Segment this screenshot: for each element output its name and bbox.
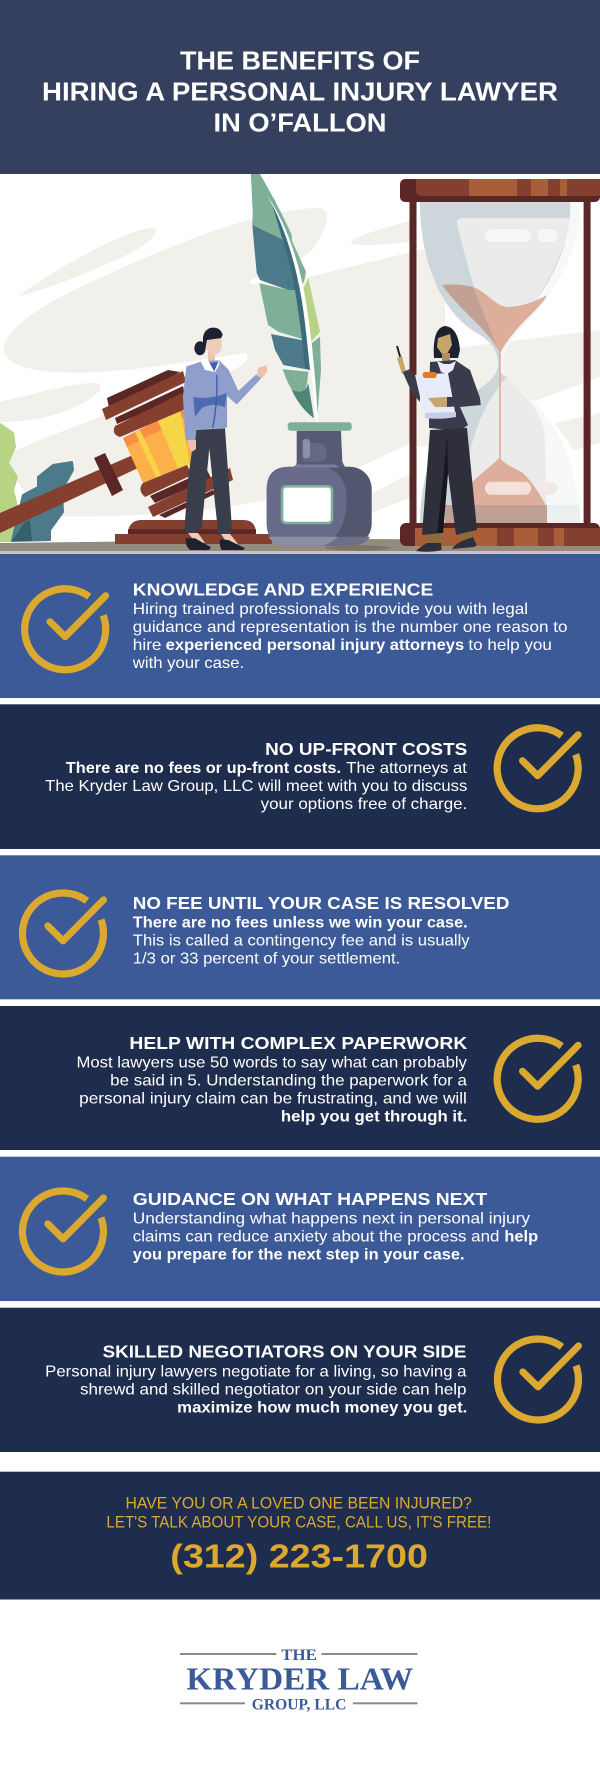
call to action text	[106, 1495, 491, 1532]
neck and head	[208, 352, 215, 365]
body text: claims can reduce anxiety about the process and	[133, 1228, 499, 1245]
body text: be said in 5. Understanding the paperwork for a	[110, 1072, 467, 1089]
body text	[45, 1363, 467, 1416]
panel: help with paperwork	[0, 1006, 600, 1150]
logo: GROUP, LLC	[252, 1696, 346, 1713]
heading: KNOWLEDGE AND EXPERIENCE	[133, 580, 433, 600]
panel: no fee until resolved	[0, 855, 600, 999]
body text: help	[504, 1228, 538, 1245]
logo: KRYDER LAW	[186, 1660, 413, 1696]
icon: gavel	[0, 370, 272, 544]
logo: THE	[281, 1647, 317, 1664]
phone number: (312) 223-1700	[170, 1537, 428, 1574]
body text: Understanding what happens next in personal injury	[133, 1210, 530, 1227]
trousers	[422, 428, 477, 535]
hourglass frame	[400, 179, 600, 546]
heading: SKILLED NEGOTIATORS ON YOUR SIDE	[103, 1342, 467, 1362]
sand	[442, 285, 547, 353]
body text: The attorneys at	[346, 760, 467, 777]
call to action text: HAVE YOU OR A LOVED ONE BEEN INJURED?	[126, 1495, 472, 1513]
icon: check circle	[22, 1191, 104, 1272]
icon: ink bottle	[267, 422, 391, 551]
glass	[420, 202, 580, 524]
bottle label	[282, 486, 332, 523]
body text	[45, 760, 467, 813]
body text: personal injury claim can be frustrating, and we will	[79, 1090, 467, 1107]
heading: NO FEE UNTIL YOUR CASE IS RESOLVED	[133, 893, 509, 913]
heading: GUIDANCE ON WHAT HAPPENS NEXT	[133, 1189, 488, 1209]
body text: hire	[133, 637, 162, 654]
body text: help you get through it.	[281, 1108, 467, 1125]
call to action text: LET'S TALK ABOUT YOUR CASE, CALL US, IT'S FREE!	[106, 1514, 491, 1532]
body text: There are no fees or up-front costs.	[66, 760, 341, 777]
body text: This is called a contingency fee and is usually	[133, 932, 470, 949]
panel: skilled negotiators	[0, 1308, 600, 1452]
body text: shrewd and skilled negotiator on your side can help	[80, 1381, 467, 1398]
title: THE BENEFITS OF	[180, 45, 420, 75]
panel: guidance on what happens next	[0, 1157, 600, 1301]
glass highlights	[485, 229, 557, 495]
suit jacket	[429, 360, 481, 431]
body text: with your case.	[132, 655, 244, 672]
body text	[133, 914, 470, 967]
title: IN O’FALLON	[214, 108, 386, 138]
trousers	[184, 428, 232, 535]
body text: to help you	[468, 637, 552, 654]
body text	[76, 1054, 467, 1125]
heading: NO UP-FRONT COSTS	[265, 739, 467, 759]
body text: Personal injury lawyers negotiate for a living, so having a	[45, 1363, 467, 1380]
header banner	[0, 0, 600, 174]
body text: There are no fees unless we win your case.	[133, 914, 468, 931]
body text: experienced personal injury attorneys	[166, 637, 464, 654]
body text: you prepare for the next step in your case.	[133, 1246, 465, 1263]
icon: check circle	[497, 1339, 578, 1420]
woman with clipboard	[397, 326, 481, 552]
panel: no up-front costs	[0, 704, 600, 849]
background swooshes	[0, 208, 420, 525]
call to action panel	[0, 1472, 600, 1600]
title: HIRING A PERSONAL INJURY LAWYER	[42, 77, 558, 107]
body text: guidance and representation is the number one reason to	[133, 619, 568, 636]
icon: check circle	[497, 1038, 578, 1119]
plants	[0, 424, 73, 541]
body text: your options free of charge.	[261, 796, 467, 813]
gavel base	[115, 520, 272, 544]
icon: quill feather	[251, 174, 321, 422]
title	[42, 45, 558, 138]
logo	[180, 1647, 418, 1713]
body text: The Kryder Law Group, LLC will meet with you to discuss	[45, 778, 467, 795]
icon: check circle	[497, 728, 578, 809]
jacket	[183, 361, 261, 440]
icon: hourglass	[400, 179, 600, 546]
body text: Most lawyers use 50 words to say what can probably	[76, 1054, 467, 1071]
ground	[0, 539, 600, 554]
icon: check circle	[22, 893, 104, 974]
panel: knowledge and experience	[0, 554, 600, 698]
body text: Hiring trained professionals to provide you with legal	[133, 601, 528, 618]
woman in blue suit	[183, 328, 267, 550]
body text	[132, 601, 568, 672]
heading: HELP WITH COMPLEX PAPERWORK	[129, 1033, 468, 1053]
icon: check circle	[25, 589, 106, 670]
body text: 1/3 or 33 percent of your settlement.	[133, 950, 400, 967]
clipboard	[415, 373, 456, 418]
body text: maximize how much money you get.	[177, 1399, 467, 1416]
body text	[133, 1210, 538, 1263]
illustration: law scene	[0, 174, 600, 554]
